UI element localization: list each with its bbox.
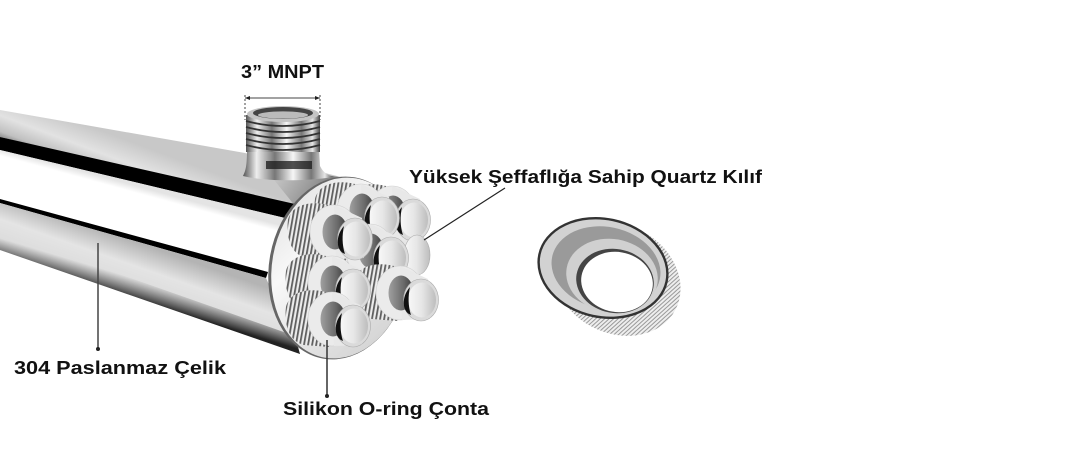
- quartz sleeves and connectors: [286, 182, 438, 347]
- callout: stainless steel: 304 Paslanmaz Çelik: [14, 358, 227, 378]
- callout: quartz sleeve: Yüksek Şeffaflığa Sahip Quartz Kılıf: [409, 167, 763, 187]
- callout: silicone o-ring: [283, 340, 490, 419]
- stainless steel reactor body: [0, 110, 345, 354]
- end flange: [254, 165, 424, 371]
- dimension marker: [245, 95, 320, 120]
- callout: quartz sleeve: [409, 167, 763, 240]
- callout: silicone o-ring: Silikon O-ring Çonta: [283, 399, 490, 419]
- 3 inch threaded port: [243, 106, 334, 180]
- callout: stainless steel: [14, 243, 227, 378]
- label: port size: 3” MNPT: [241, 62, 324, 82]
- separate retaining nut: [529, 200, 701, 358]
